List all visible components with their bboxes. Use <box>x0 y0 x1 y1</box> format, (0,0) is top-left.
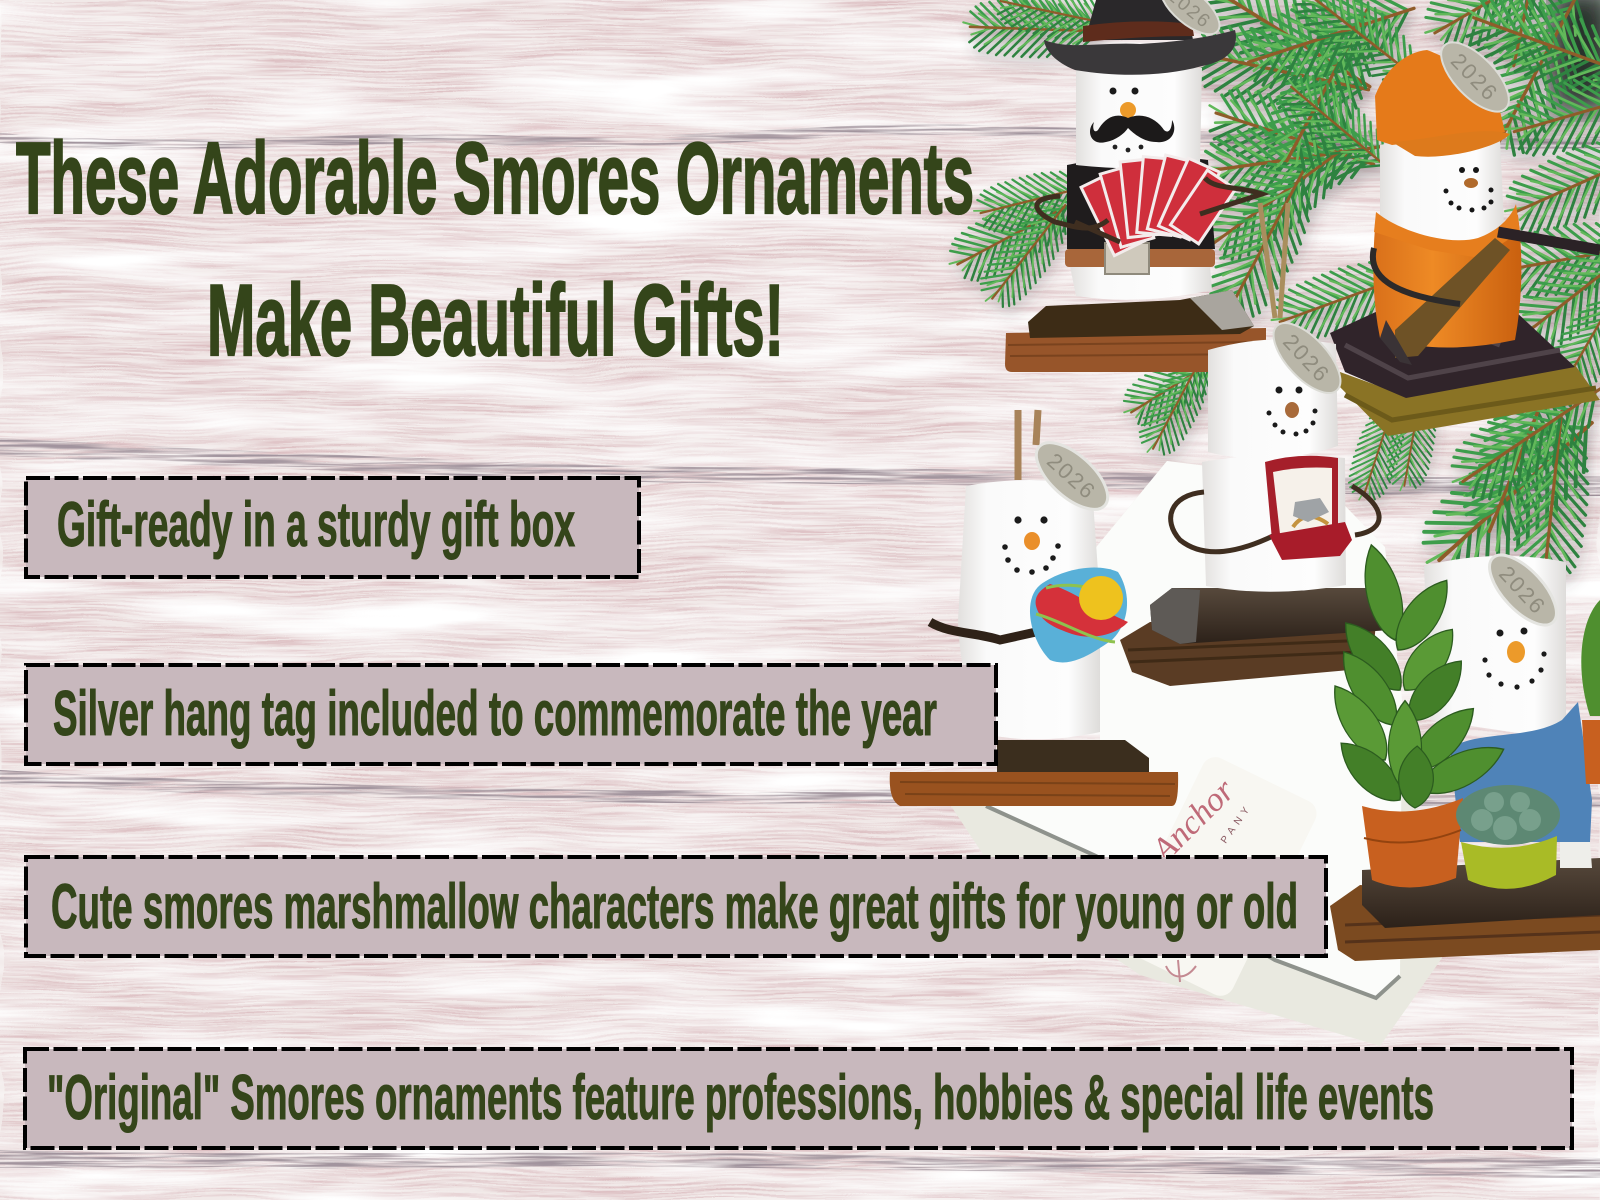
box label with logo: Anchor <box>1144 772 1243 870</box>
hunter face <box>1444 167 1494 212</box>
ring face <box>1266 386 1318 436</box>
fan of cards <box>1081 155 1236 256</box>
ornament: gardener with plants <box>1321 541 1600 961</box>
right edge potted plant <box>1581 600 1600 784</box>
feature box: original ornaments <box>25 1049 1572 1148</box>
hanging twine <box>1260 203 1288 318</box>
twig arms <box>1171 486 1379 552</box>
year tag: 2026 <box>1042 448 1101 505</box>
year tag <box>1025 431 1119 521</box>
year tag: 2026 <box>1278 329 1335 388</box>
box label with logo: PANY <box>1219 801 1255 846</box>
year tag: 2026 <box>1494 561 1551 620</box>
gardener face <box>1482 628 1547 690</box>
gift box <box>951 461 1442 1046</box>
ornament: engagement ring box <box>1120 203 1390 686</box>
feature box: hang tag <box>26 665 996 764</box>
paddle <box>1030 568 1128 662</box>
feature box: characters <box>26 857 1326 956</box>
ornament: pickleball paddle <box>890 410 1178 806</box>
year tag <box>1152 0 1228 43</box>
title: Make Beautiful Gifts! <box>207 265 784 377</box>
title <box>16 123 974 377</box>
feature box: hang tag: Silver hang tag included to commemorate the year <box>53 679 937 749</box>
ornament: cowboy playing cards <box>1005 0 1266 372</box>
twig arms <box>1037 178 1262 242</box>
rifle <box>1373 232 1600 365</box>
twig arm <box>930 622 1036 640</box>
cowboy hat <box>1044 0 1236 75</box>
feature box: gift box <box>26 478 639 577</box>
hanging twine <box>1018 410 1038 480</box>
tall potted plant <box>1321 541 1511 888</box>
year tag <box>1478 544 1568 636</box>
year tag: 2026 <box>1446 48 1503 107</box>
year tag <box>1430 31 1520 123</box>
box label with logo <box>1115 752 1321 1000</box>
pine branches <box>938 0 1600 599</box>
red ring box with ring <box>1265 456 1352 560</box>
ornament: hunter in orange vest <box>1330 31 1600 436</box>
feature box: gift box: Gift-ready in a sturdy gift box <box>57 490 575 560</box>
small succulent in lime pot <box>1456 785 1560 889</box>
year tag <box>1262 312 1352 404</box>
pickleball face <box>1002 516 1061 575</box>
orange cap <box>1375 50 1510 157</box>
face with moustache <box>1090 88 1174 152</box>
orange vest collar <box>1374 204 1520 258</box>
